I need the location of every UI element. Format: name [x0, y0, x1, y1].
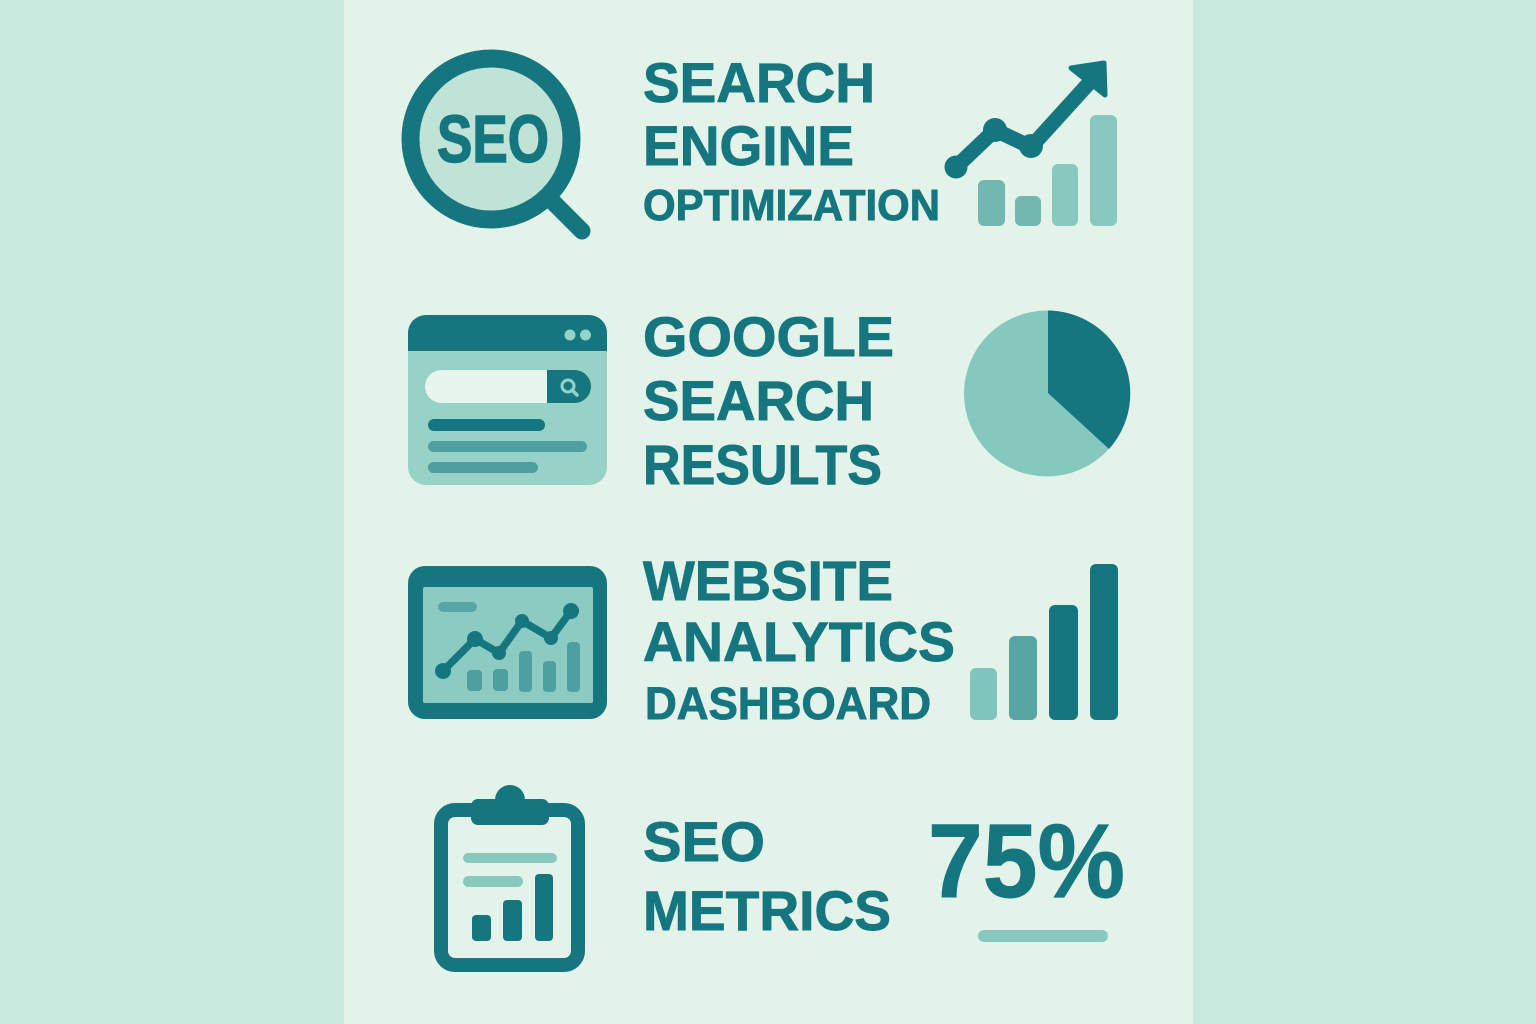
chart: ascending bars	[970, 564, 1118, 720]
icon: SEO magnifying glass	[410, 58, 582, 231]
icon: browser search window	[408, 315, 607, 485]
heading: search engine optimization: SEARCH	[643, 51, 875, 114]
icon: analytics monitor	[408, 566, 607, 719]
heading: search engine optimization: ENGINE	[643, 114, 854, 177]
heading: google search results: SEARCH	[643, 369, 874, 432]
panel: search engine optimization	[410, 51, 1117, 231]
heading: website analytics dashboard	[643, 549, 955, 729]
panel: google search results	[408, 305, 1130, 496]
heading: search engine optimization	[643, 51, 940, 230]
heading: website analytics dashboard: DASHBOARD	[645, 678, 931, 729]
panel: website analytics dashboard	[408, 549, 1118, 729]
heading: search engine optimization: OPTIMIZATION	[643, 181, 940, 230]
icon: SEO magnifying glass: SEO	[437, 102, 549, 177]
heading: website analytics dashboard: ANALYTICS	[643, 610, 955, 673]
chart: pie	[964, 310, 1130, 476]
chart: rising trend line with bars	[944, 63, 1117, 226]
heading: seo metrics: SEO	[643, 810, 765, 873]
heading: seo metrics	[643, 810, 891, 942]
heading: google search results: RESULTS	[643, 433, 882, 496]
heading: google search results	[643, 305, 894, 496]
stat: 75 percent: 75%	[928, 803, 1125, 920]
icon: clipboard report	[441, 785, 578, 965]
heading: google search results: GOOGLE	[643, 305, 894, 368]
heading: website analytics dashboard: WEBSITE	[643, 549, 893, 612]
panel: seo metrics	[441, 785, 1125, 965]
heading: seo metrics: METRICS	[643, 879, 891, 942]
